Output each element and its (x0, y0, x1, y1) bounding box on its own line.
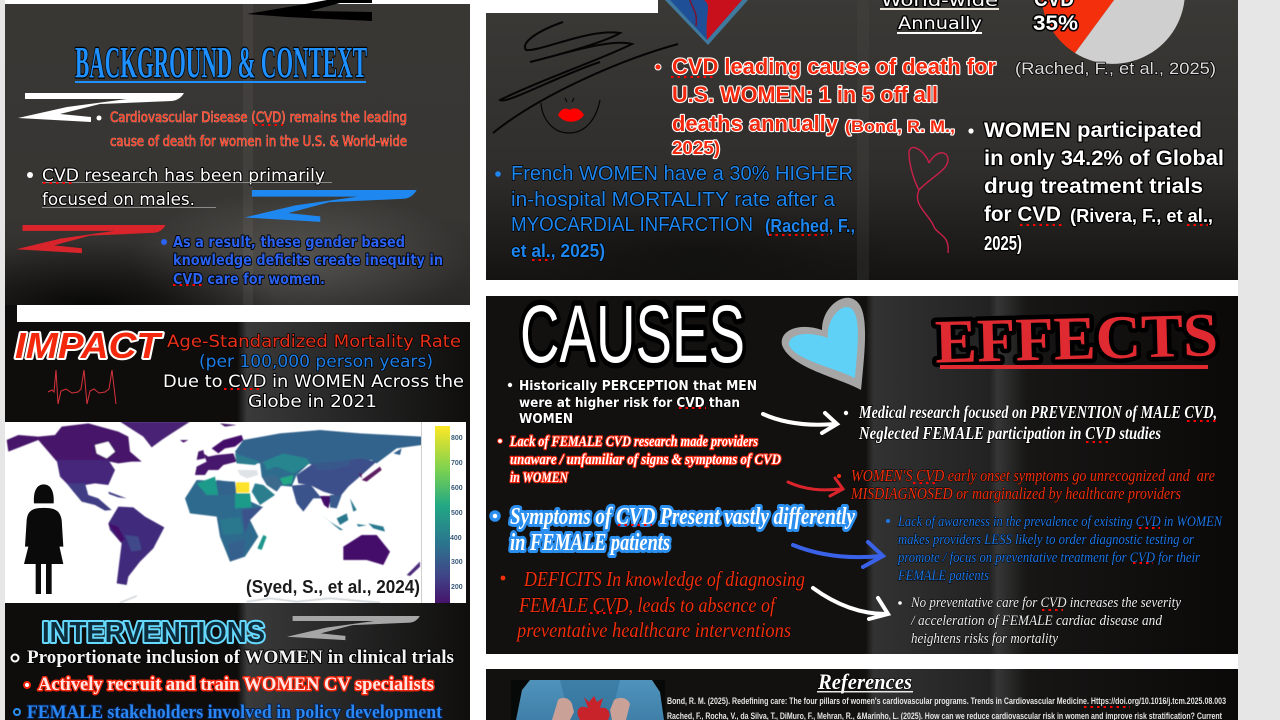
arrow: red (788, 478, 843, 496)
text: women in drug trials: drug treatment trials (984, 175, 1203, 198)
text: gender knowledge deficits (161, 233, 443, 288)
list: interventions (12, 647, 454, 720)
text: deficits in diagnosing: preventative healthcare interventions (515, 618, 791, 642)
text: lack of female research (498, 434, 781, 486)
text: gender knowledge deficits: knowledge deficits create inequity in (173, 251, 443, 269)
arrow: white one (763, 413, 837, 433)
text: gender knowledge deficits: As a result, these gender based (173, 233, 405, 251)
text: lack of female research: unaware / unfamiliar of signs & symptoms of CVD (510, 452, 781, 468)
arrow: blue (793, 542, 883, 567)
label: world-wide annually (880, 0, 999, 34)
panel: impact and interventions (5, 322, 470, 720)
text: deficits in diagnosing (501, 567, 805, 642)
image: heart held in hands (511, 680, 665, 720)
text: French women mortality: (Rached, F., (765, 216, 855, 236)
heading: references: References (817, 669, 912, 694)
swoosh: black (247, 0, 372, 21)
text: no preventative care (898, 595, 1181, 647)
text: leading cause: cause of death for women in the U.S. & World-wide (110, 134, 407, 150)
text: leading cause: Cardiovascular Disease (CVD) remains the leading (110, 110, 407, 126)
label: world-wide annually: Annually (898, 14, 982, 34)
legend: colour scale: 200 (451, 584, 463, 591)
text: map title (163, 332, 464, 412)
legend: colour scale: 500 (451, 510, 463, 517)
text: research focus: CVD research has been primarily (42, 166, 325, 186)
text: women in drug trials: 2025) (984, 233, 1022, 255)
black corner tab (5, 305, 17, 322)
text: French women mortality: in-hospital MORTALITY rate after a (511, 189, 836, 211)
text: women in drug trials (968, 119, 1224, 255)
legend: colour scale: 700 (451, 460, 463, 467)
map: mortality rate by country (5, 422, 466, 603)
text: lack of awareness (886, 514, 1223, 584)
heading: causes: CAUSES (520, 289, 745, 380)
text: historic perception: were at higher risk for CVD than (519, 396, 740, 411)
text: lack of awareness: Lack of awareness in the prevalence of existing CVD in WOMEN (897, 514, 1223, 530)
text: reference list (667, 696, 1226, 720)
text: lack of female research: Lack of FEMALE CVD research made providers (509, 434, 758, 450)
legend: colour scale (421, 422, 463, 603)
text: no preventative care: No preventative care for CVD increases the severity (910, 595, 1181, 611)
text: leading cause for US women: CVD leading cause of death for (672, 54, 996, 79)
text: lack of awareness: promote / focus on preventative treatment for CVD for their (897, 550, 1200, 566)
panel: statistics (472, 0, 1238, 295)
text: map title: Due to CVD in WOMEN Across the (163, 372, 464, 392)
text: French women mortality (495, 163, 855, 261)
text: map title: Globe in 2021 (248, 392, 377, 412)
panel: background and context: BACKGROUND & CONTEXT (75, 38, 367, 87)
icon: anatomical heart (665, 0, 748, 45)
text: French women mortality: French WOMEN have a 30% HIGHER (511, 163, 853, 185)
text: historic perception: Historically PERCEPTION that MEN (519, 379, 757, 394)
text: leading cause for US women: U.S. WOMEN: 1 in 5 off all (672, 82, 938, 107)
legend: colour scale: 400 (450, 535, 462, 542)
text: deficits in diagnosing: DEFICITS In knowledge of diagnosing (523, 567, 805, 591)
heading: effects: EFFECTS (934, 301, 1219, 377)
icon: blue heart (782, 298, 865, 390)
heading: impact: IMPACT (15, 325, 163, 366)
citation: pie source: (Rached, F., et al., 2025) (1015, 59, 1216, 78)
text: misdiagnosed symptoms (837, 466, 1215, 503)
panel: background and context (5, 0, 470, 305)
legend: colour scale: 600 (451, 485, 463, 492)
text: historic perception: WOMEN (519, 412, 573, 427)
list: interventions: Proportionate inclusion of WOMEN in clinical trials (27, 647, 454, 668)
text: historic perception (508, 379, 757, 427)
text: leading cause for US women: (Bond, R. M., (845, 117, 955, 136)
text: women in drug trials: (Rivera, F., et al., (1070, 206, 1213, 226)
text: misdiagnosed symptoms: WOMEN'S CVD early onset symptoms go unrecognized and are (851, 466, 1215, 485)
citation: map source: (Syed, S., et al., 2024) (246, 577, 420, 597)
icon: woman silhouette (24, 484, 63, 594)
text: research on male prevention: Neglected FEMALE participation in CVD studies (858, 423, 1161, 443)
text: leading cause (96, 110, 407, 150)
list: interventions: Actively recruit and train WOMEN CV specialists (38, 674, 434, 695)
text: leading cause for US women: 2025) (672, 138, 720, 158)
text: deficits in diagnosing: FEMALE CVD, leads to absence of (518, 593, 778, 617)
text: lack of awareness: makes providers LESS likely to order diagnostic testing or (898, 532, 1194, 548)
swoosh: white (18, 93, 184, 122)
panel: causes and effects (486, 289, 1238, 654)
panel: references (486, 669, 1238, 720)
text: gender knowledge deficits: CVD care for women. (173, 270, 325, 288)
text: map title: Age-Standardized Mortality Rate (167, 332, 461, 352)
swoosh: blue (245, 190, 417, 222)
text: research on male prevention (844, 402, 1217, 443)
text: symptoms present differently: Symptoms of CVD Present vastly differently (510, 504, 855, 530)
text: misdiagnosed symptoms: MISDIAGNOSED or marginalized by healthcare providers (850, 484, 1181, 503)
legend: colour scale: 300 (451, 559, 463, 566)
text: no preventative care: heightens risks for mortality (911, 631, 1058, 647)
text: French women mortality: et al., 2025) (511, 241, 605, 261)
text: lack of female research: in WOMEN (510, 470, 569, 486)
text: map title: (per 100,000 person years) (199, 352, 433, 372)
text: leading cause for US women: deaths annually (672, 111, 839, 136)
text: research focus (27, 166, 332, 210)
text: lack of awareness: FEMALE patients (897, 568, 989, 584)
heading: interventions: INTERVENTIONS (42, 617, 265, 649)
text: women in drug trials: for CVD (984, 203, 1061, 226)
text: women in drug trials: in only 34.2% of Global (984, 147, 1224, 170)
icon: heartbeat trace (48, 370, 116, 404)
legend: colour scale: 800 (451, 435, 463, 442)
text: symptoms present differently: in FEMALE patients (510, 530, 670, 556)
text: no preventative care: / acceleration of FEMALE cardiac disease and (910, 613, 1162, 629)
text: research focus: focused on males. (42, 190, 195, 210)
label: pie percentages: 35% (1033, 12, 1078, 35)
swoosh: red (16, 225, 166, 253)
icon: heart squiggle (909, 147, 948, 253)
swoosh: grey (287, 616, 420, 640)
chart: pie of deaths world-wide (1041, 0, 1185, 64)
text: French women mortality: MYOCARDIAL INFARCTION (511, 214, 753, 236)
text: symptoms present differently (491, 504, 855, 556)
icon: woman with hat sketch (493, 22, 678, 133)
text: leading cause for US women (655, 54, 996, 158)
arrow: white two (813, 588, 888, 619)
label: pie percentages (1033, 0, 1078, 35)
text: women in drug trials: WOMEN participated (984, 119, 1202, 142)
